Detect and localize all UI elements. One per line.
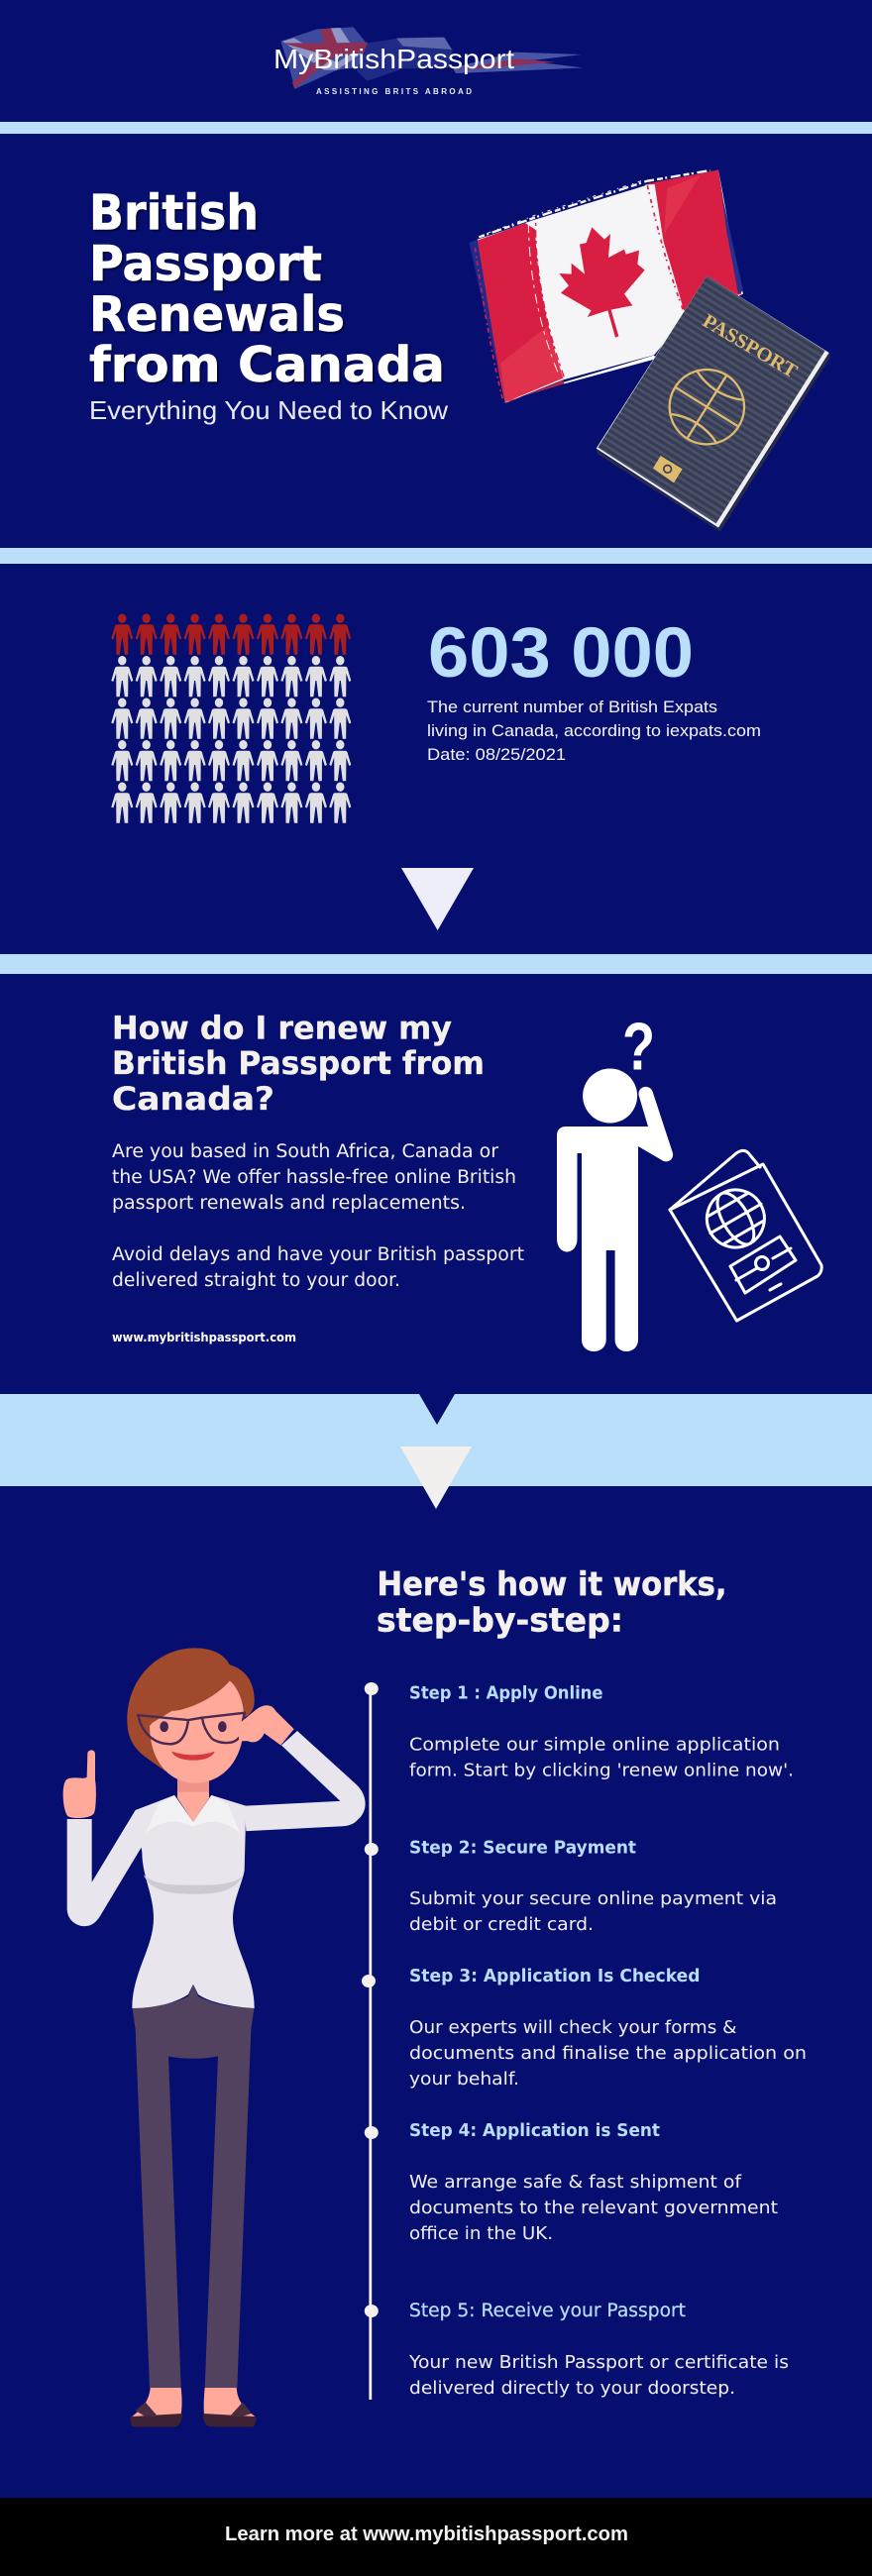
icon: passport outline: [670, 1150, 821, 1321]
statistic caption: Date: 08/25/2021: [427, 745, 566, 764]
step 3: [409, 1966, 807, 2090]
website link: www.mybritishpassport.com: [112, 1330, 296, 1344]
step 1: Complete our simple online application: [409, 1734, 780, 1756]
eyes: [160, 1721, 168, 1732]
torso shirt: [132, 1795, 255, 2008]
renew paragraph 2: delivered straight to your door.: [112, 1270, 400, 1291]
icon: thinking person: [557, 1009, 673, 1351]
step 3: Our experts will check your forms &: [409, 2017, 737, 2038]
passport: [597, 275, 830, 532]
globe emblem: [696, 1179, 776, 1258]
thumb-up hand: [63, 1750, 96, 1818]
divider band 1: [0, 122, 872, 134]
renew heading: How do I renew my: [112, 1009, 452, 1046]
step 5: Step 5: Receive your Passport: [409, 2301, 686, 2321]
step 4: We arrange safe & fast shipment of: [409, 2172, 742, 2193]
step 4: office in the UK.: [409, 2223, 553, 2244]
statistic number: 603 000: [428, 614, 694, 693]
footer band: [0, 2498, 872, 2576]
renew paragraph 1: the USA? We offer hassle-free online British: [112, 1167, 516, 1188]
hero title: from Canada: [89, 337, 445, 393]
raised arm sleeve: [245, 1731, 366, 1831]
woman illustration: [63, 1648, 366, 2426]
divider band 2: [0, 548, 872, 564]
timeline: [362, 1682, 379, 2400]
collar: [146, 1795, 241, 1834]
step 1: Step 1 : Apply Online: [409, 1682, 602, 1704]
Canadian flag: [469, 170, 743, 403]
step 1: [409, 1682, 794, 1781]
arrow: white triangle: [400, 1447, 472, 1509]
logo wordmark: MyBritishPassport: [273, 44, 514, 74]
white rows: [111, 656, 351, 823]
renew paragraph 1: passport renewals and replacements.: [112, 1193, 466, 1214]
step 2: Submit your secure online payment via: [409, 1888, 777, 1909]
maple leaf: [559, 227, 645, 338]
hero title: [89, 184, 445, 393]
logo tagline: ASSISTING BRITS ABROAD: [316, 87, 472, 96]
hero title: British: [89, 184, 259, 242]
step 3: documents and finalise the application on: [409, 2043, 807, 2064]
step 5: [408, 2301, 789, 2399]
hand at glasses: [236, 1705, 294, 1746]
statistic caption: The current number of British Expats: [427, 698, 717, 716]
passport label: PASSPORT: [699, 310, 802, 382]
hero subtitle: Everything You Need to Know: [89, 395, 448, 425]
step 2: Step 2: Secure Payment: [409, 1837, 636, 1859]
logo: [273, 27, 583, 96]
renew heading: British Passport from: [112, 1044, 485, 1082]
step 4: Step 4: Application is Sent: [409, 2120, 660, 2141]
logo: union flag ribbon: [280, 27, 583, 89]
renew paragraph 1: [112, 1141, 516, 1214]
step 5: delivered directly to your doorstep.: [409, 2378, 735, 2399]
renew paragraph 2: Avoid delays and have your British passport: [112, 1244, 524, 1265]
hero title: Renewals: [89, 286, 345, 343]
step 4: [409, 2120, 778, 2244]
step 4: documents to the relevant government: [409, 2198, 778, 2218]
left foot: [131, 2388, 182, 2426]
step 1: form. Start by clicking 'renew online now'.: [409, 1760, 794, 1781]
renew heading: Canada?: [112, 1080, 274, 1118]
passport globe emblem: [655, 356, 758, 459]
statistic caption: [427, 698, 761, 764]
step 5: Your new British Passport or certificate is: [408, 2352, 789, 2373]
steps heading: step-by-step:: [377, 1601, 623, 1639]
renew paragraph 2: [112, 1244, 524, 1291]
divider band 3: [0, 954, 872, 974]
steps heading: Here's how it works,: [377, 1564, 727, 1603]
red row: [111, 614, 351, 655]
light band with arrows: [0, 1394, 872, 1509]
shirt shadow: [144, 1875, 243, 1894]
pointing arm sleeve: [67, 1809, 142, 1926]
hero title: Passport: [89, 236, 322, 292]
face: [150, 1681, 244, 1783]
arrow: down triangle: [401, 868, 474, 930]
neck: [177, 1774, 209, 1822]
hair: [127, 1648, 255, 1771]
smile: [171, 1752, 215, 1761]
step 2: debit or credit card.: [409, 1914, 594, 1935]
flag brush edges: [475, 170, 710, 403]
photo card: [730, 1236, 796, 1293]
steps heading: [377, 1564, 727, 1639]
step 2: [409, 1837, 777, 1935]
step 3: Step 3: Application Is Checked: [409, 1966, 700, 1986]
statistic caption: living in Canada, according to iexpats.com: [427, 721, 761, 740]
trousers: [132, 1985, 255, 2388]
footer text: Learn more at www.mybitishpassport.com: [225, 2523, 628, 2545]
hero illustration: Canadian flag and passport: [469, 170, 830, 532]
passport chip: [653, 456, 683, 483]
right foot: [203, 2388, 256, 2426]
renew heading: [112, 1009, 485, 1118]
pictogram: people, one row of ten in red: [111, 614, 351, 823]
notch arrow: [419, 1394, 455, 1425]
question mark: ?: [622, 1009, 655, 1084]
step 3: your behalf.: [409, 2069, 519, 2090]
renew paragraph 1: Are you based in South Africa, Canada or: [112, 1141, 498, 1162]
glasses: [138, 1713, 245, 1744]
